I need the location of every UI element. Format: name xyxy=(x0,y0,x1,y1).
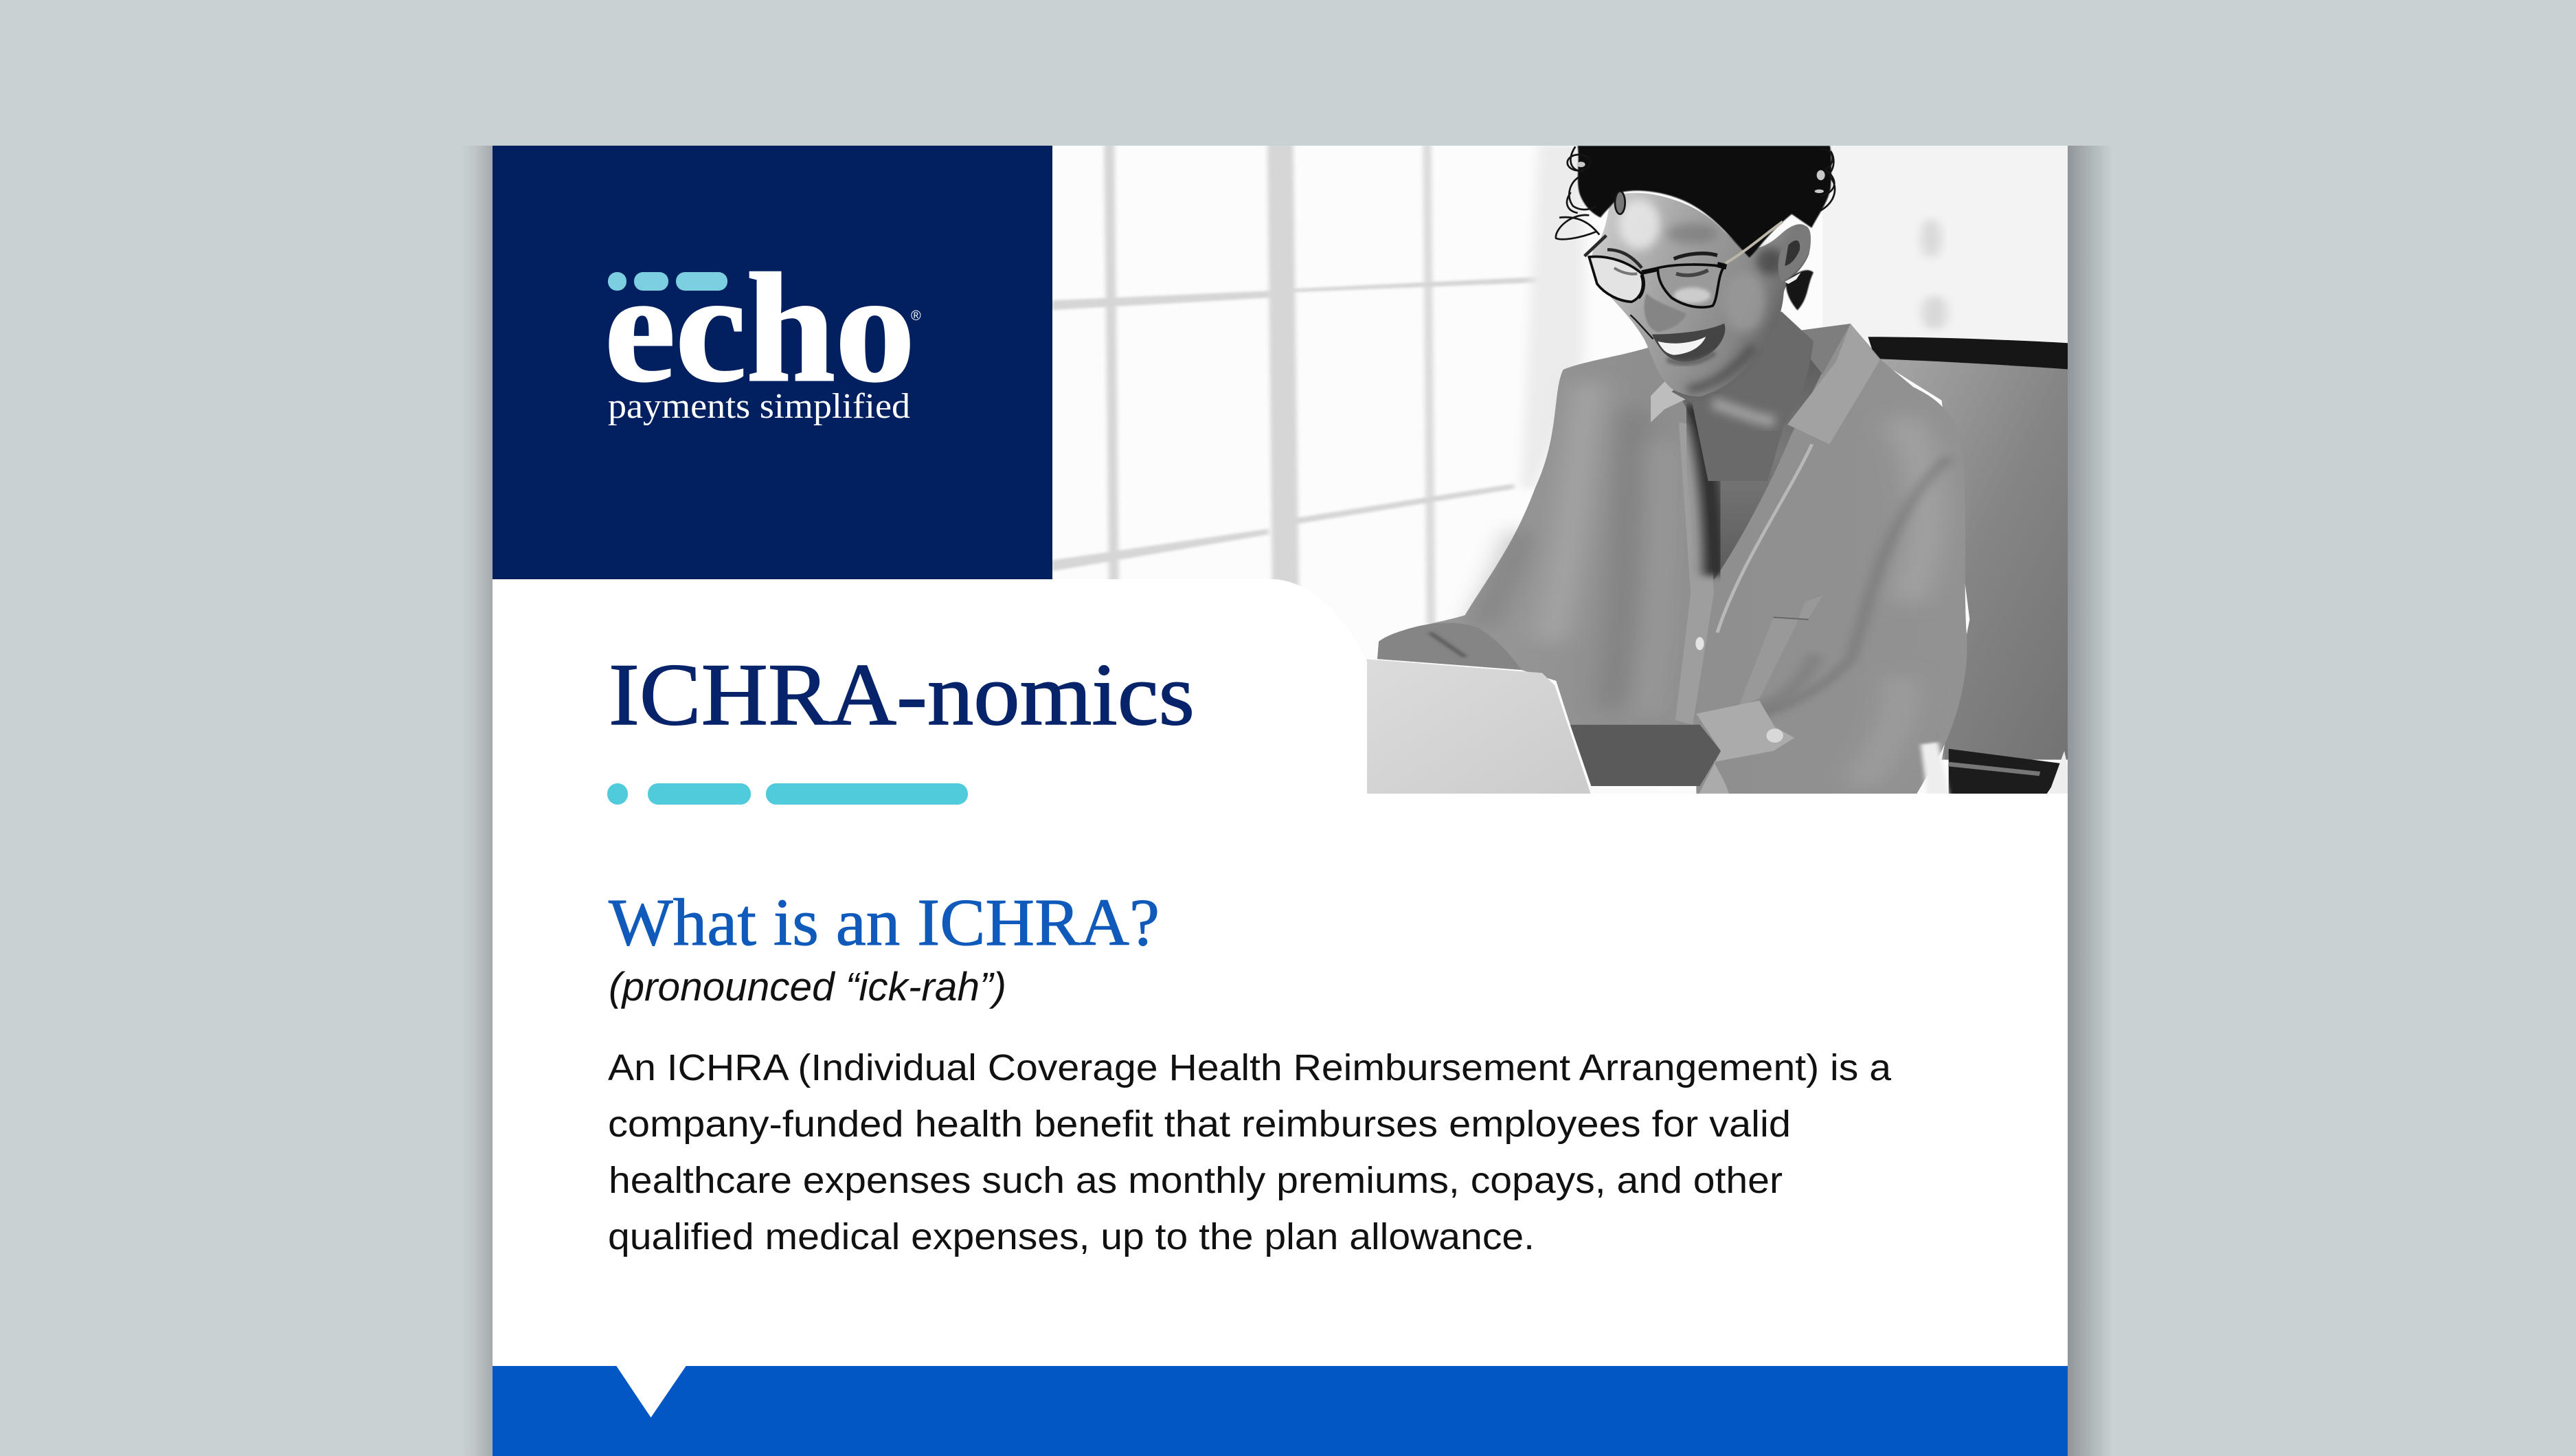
title: ICHRA-nomics xyxy=(609,645,1195,743)
glasses lenses xyxy=(1591,258,1642,301)
earring and lower curls xyxy=(1786,270,1814,311)
neck and chest xyxy=(1683,359,1822,581)
placket xyxy=(1675,423,1714,725)
window background xyxy=(1052,146,2068,624)
body paragraph: healthcare expenses such as monthly premiums, copays, and other xyxy=(609,1160,1783,1201)
laptop xyxy=(1364,659,1592,799)
photo: woman at laptop by window xyxy=(1052,137,2075,803)
body paragraph: company-funded health benefit that reimburses employees for valid xyxy=(608,1104,1791,1145)
infographic page xyxy=(471,146,2106,1456)
logo tagline: payments simplified xyxy=(608,387,910,426)
glasses temple left xyxy=(1585,236,1606,256)
face xyxy=(1592,193,1811,396)
logo dots xyxy=(608,272,727,291)
registered mark: ® xyxy=(911,309,921,324)
right page shadow xyxy=(2068,146,2112,1456)
forearm xyxy=(1570,725,1721,786)
ear xyxy=(1778,225,1811,282)
rolled cuff xyxy=(1696,701,1794,799)
white object foreground xyxy=(1921,742,1950,799)
logo: echo xyxy=(605,242,921,426)
body paragraph xyxy=(608,1047,1892,1257)
face and hair xyxy=(1556,146,1835,481)
left page shadow xyxy=(460,146,493,1456)
eyes xyxy=(1614,268,1637,274)
eyebrows xyxy=(1607,249,1642,268)
collar xyxy=(1651,324,1880,444)
hand and sleeve at laptop xyxy=(1377,623,1521,670)
body paragraph: qualified medical expenses, up to the plan allowance. xyxy=(608,1216,1535,1257)
curls xyxy=(1556,146,1835,239)
footer band xyxy=(493,1366,2068,1456)
pronunciation note: (pronounced “ick-rah”) xyxy=(609,965,1006,1009)
heading: What is an ICHRA? xyxy=(609,886,1160,960)
footer notch pointer xyxy=(615,1365,687,1418)
white page panel xyxy=(493,146,2068,1456)
shirt xyxy=(1377,324,1967,799)
hair xyxy=(1578,146,1831,258)
title divider bars xyxy=(607,783,968,805)
neck under jaw xyxy=(1671,311,1814,481)
glasses temple right xyxy=(1726,222,1783,263)
white curved cutout xyxy=(1030,579,1367,794)
glasses frame xyxy=(1589,256,1726,307)
body paragraph: An ICHRA (Individual Coverage Health Reimbursement Arrangement) is a xyxy=(608,1047,1892,1088)
navy logo panel xyxy=(493,146,1052,579)
chair xyxy=(1868,337,2075,799)
logo wordmark: echo xyxy=(605,242,915,414)
mouth xyxy=(1652,324,1725,362)
nose xyxy=(1645,293,1686,332)
